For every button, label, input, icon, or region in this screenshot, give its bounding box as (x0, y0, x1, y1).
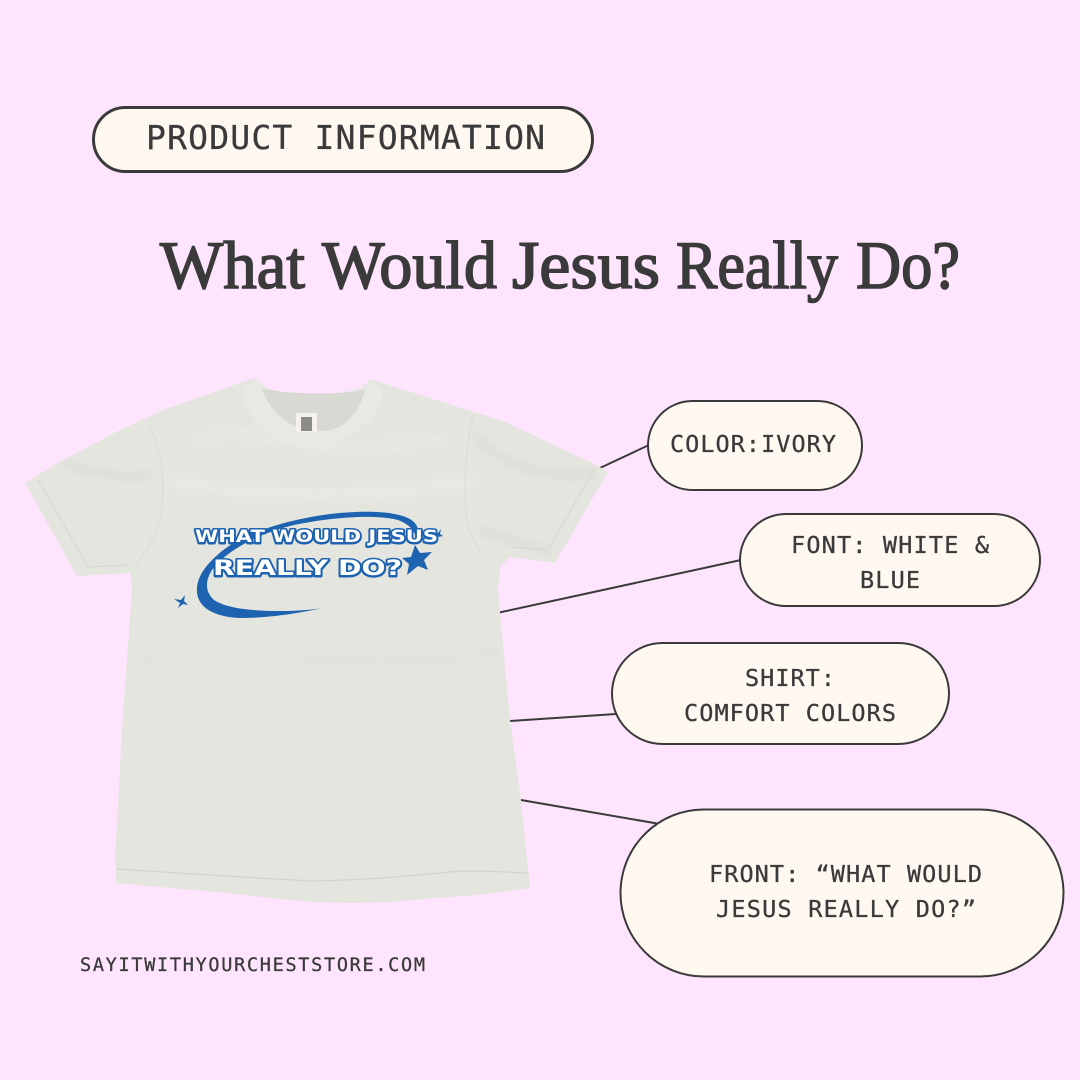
title (160, 227, 960, 303)
badge: product information: PRODUCT INFORMATION (146, 118, 545, 157)
badge: product information (94, 108, 592, 172)
bottom hem (117, 869, 527, 881)
callout: front (620, 810, 1064, 976)
print text: REALLY DO? (213, 556, 402, 580)
star: tip (433, 529, 443, 541)
title: Really (676, 227, 838, 303)
callout: shirt: SHIRT: (745, 664, 835, 692)
footer url: SAYITWITHYOURCHESTSTORE.COM (80, 955, 425, 976)
callout: shirt (612, 643, 949, 744)
star: large (402, 545, 432, 575)
print text: WHAT WOULD JESUS (195, 527, 438, 547)
callout: color (648, 401, 862, 490)
shirt body (25, 377, 608, 903)
collar ribbing (243, 377, 383, 445)
fold shading (65, 434, 590, 662)
callout: font (740, 514, 1040, 606)
armhole seams (162, 472, 164, 490)
sleeve hems (38, 480, 130, 567)
callout: front: FRONT: “WHAT WOULD (709, 860, 982, 888)
print text (195, 527, 438, 580)
title: What (160, 227, 305, 303)
neck label (296, 413, 317, 432)
t-shirt photo (25, 377, 608, 903)
title: Would (322, 227, 497, 303)
star: small sparkle (174, 595, 188, 608)
title: Jesus (512, 227, 660, 303)
connector lines (497, 445, 741, 824)
callout: font: BLUE (860, 566, 920, 594)
neck interior (262, 388, 365, 431)
callout: font: FONT: WHITE & (791, 531, 990, 559)
callout: shirt: COMFORT COLORS (684, 699, 896, 727)
swoosh (197, 512, 419, 618)
title: Do? (856, 227, 960, 303)
callout: front: JESUS REALLY DO?” (716, 895, 976, 923)
callout: color: COLOR:IVORY (670, 430, 836, 458)
graphic print (174, 512, 443, 618)
